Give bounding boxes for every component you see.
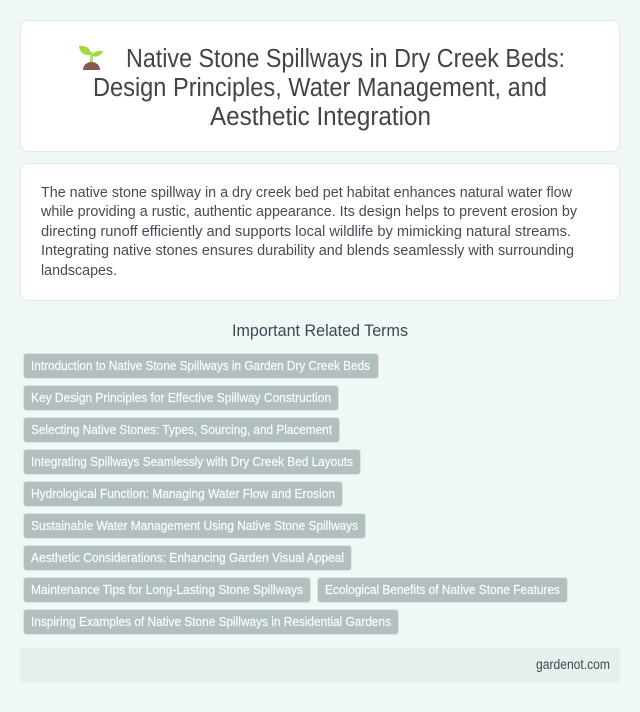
description text: The native stone spillway in a dry creek bed pet habitat enhances natural water flow [41,184,572,201]
description text: Integrating native stones ensures durability and blends seamlessly with surrounding [41,242,574,259]
title text: Aesthetic Integration [210,103,431,131]
tag 10 [24,610,398,634]
tag 5 [24,482,342,506]
tag 4 [24,450,360,474]
tag 9 [318,578,568,602]
description text [40,184,577,279]
title text [93,45,565,131]
description text: directing runoff efficiently and supports local wildlife by mimicking natural streams. [41,223,571,240]
tag 1: Introduction to Native Stone Spillways in Garden Dry Creek Beds [31,359,370,373]
title text: Design Principles, Water Management, and [93,74,547,102]
tag 6: Sustainable Water Management Using Native Stone Spillways [31,519,358,533]
description text: landscapes. [41,262,117,279]
tag 5: Hydrological Function: Managing Water Flow and Erosion [31,487,335,501]
icon: seedling [79,46,103,70]
footer [20,648,620,682]
tag 4: Integrating Spillways Seamlessly with Dry Creek Bed Layouts [31,455,353,469]
panel: title card [20,20,620,152]
tag 10: Inspiring Examples of Native Stone Spillways in Residential Gardens [31,615,391,629]
tag 6 [24,514,366,538]
tag 2: Key Design Principles for Effective Spillway Construction [31,391,331,405]
title text: Native Stone Spillways in Dry Creek Beds: [126,45,565,73]
heading: important related terms: Important Related Terms [232,322,408,340]
panel: related term tags [24,354,568,634]
footer: gardenot.com [536,657,610,672]
tag 9: Ecological Benefits of Native Stone Features [325,583,560,597]
tag 3 [24,418,340,442]
description text: while providing a rustic, authentic appearance. Its design helps to prevent erosion by [40,203,577,220]
tag 3: Selecting Native Stones: Types, Sourcing, and Placement [31,423,332,437]
tag 2 [24,386,338,410]
panel: description [20,164,620,300]
tag 7: Aesthetic Considerations: Enhancing Garden Visual Appeal [31,551,344,565]
tag 8: Maintenance Tips for Long-Lasting Stone Spillways [31,583,303,597]
tag 8 [24,578,310,602]
tag 7 [24,546,352,570]
tag 1 [24,354,378,378]
